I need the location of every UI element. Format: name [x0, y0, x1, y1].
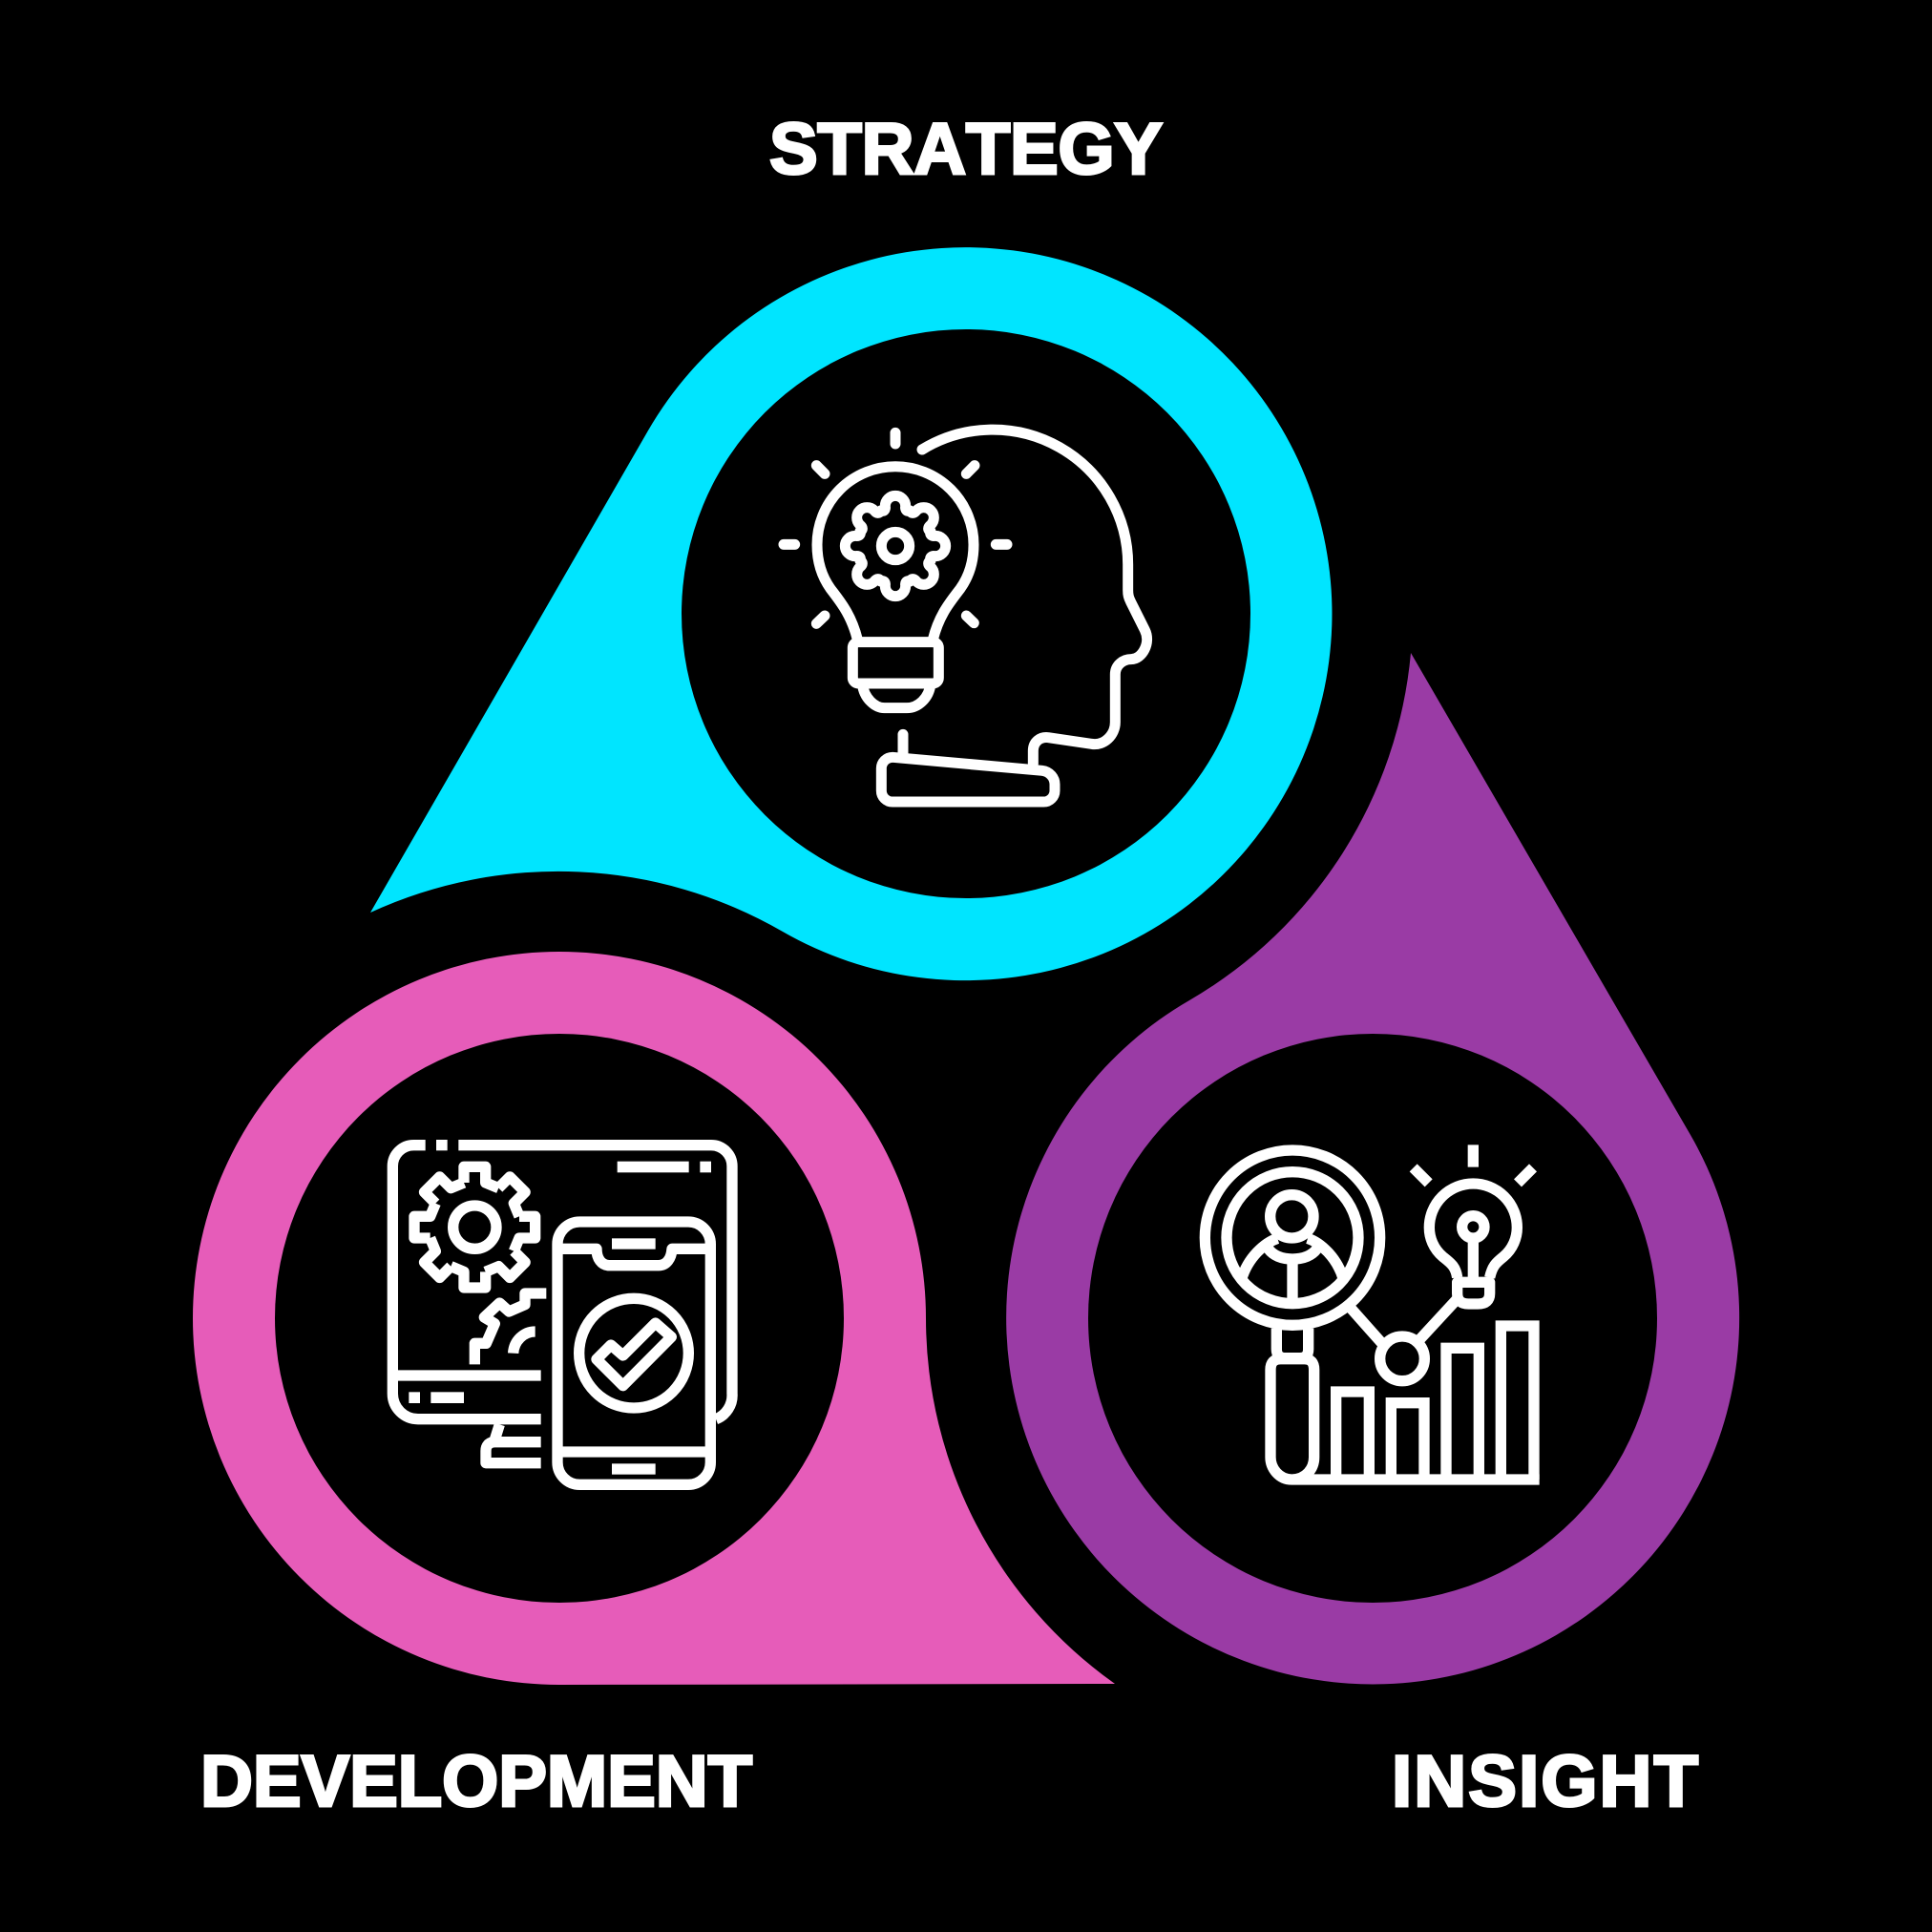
heading: development: DEVELOPMENT [200, 1741, 752, 1822]
heading: insight: INSIGHT [1392, 1741, 1698, 1822]
panel: development teardrop [193, 952, 1115, 1685]
heading: strategy: STRATEGY [769, 109, 1163, 190]
icon: magnifier with person, bulb and bar chart [1205, 1144, 1540, 1480]
panel: insight teardrop [1006, 653, 1739, 1684]
icon: monitor and phone with gears [392, 1145, 732, 1484]
icon: head with light bulb and gear [784, 430, 1147, 802]
panel: strategy teardrop [370, 247, 1332, 980]
